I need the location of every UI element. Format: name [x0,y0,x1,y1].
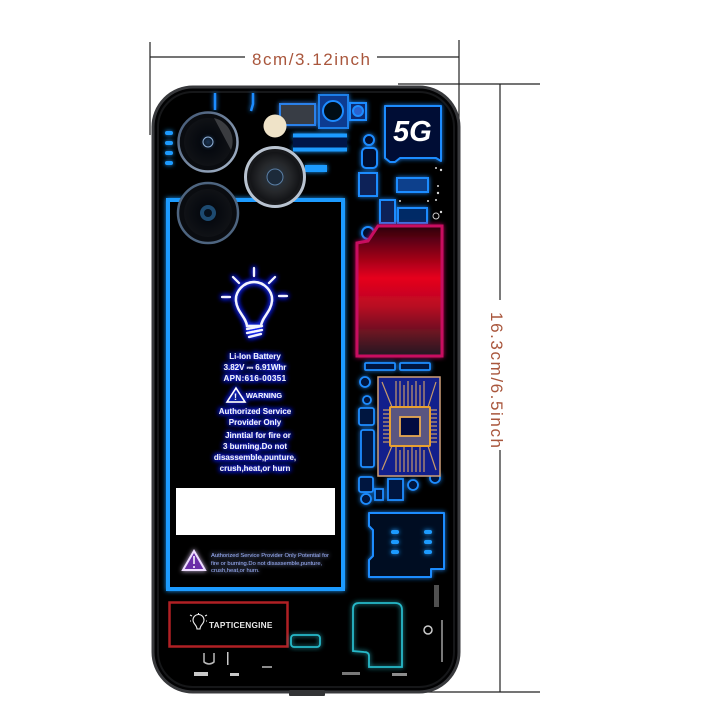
width dimension [150,40,459,135]
battery text: crush,heat,or hurn [220,464,290,473]
height dimension [395,84,540,692]
battery text: Jinntial for fire or [225,431,291,440]
warning triangle [183,551,205,570]
white label [176,488,335,535]
small warning text: Authorized Service Provider Only Potential for [211,553,329,559]
connector pills and side parts [359,363,440,504]
chip core [390,407,430,446]
processor chip [378,377,440,476]
camera lenses [178,112,304,243]
taptic text: TAPTICENGINE [209,620,273,630]
battery text: 3 burning.Do not [223,442,287,451]
battery text: 3.82V ⎓ 6.91Whr [224,363,286,372]
case body [153,87,459,692]
battery text: Authorized Service [219,407,292,416]
right side specks [399,167,442,219]
case bottom button [289,690,325,696]
bottom components [194,585,443,676]
phone case [153,87,459,696]
red block [357,226,442,356]
battery text: Provider Only [229,418,282,427]
battery text [214,352,296,473]
cyan pill [291,635,320,647]
chip center [400,417,420,436]
cyan outline shape [353,603,402,667]
battery text: ! [234,392,237,402]
side dots [165,131,173,165]
lens bottom left [178,183,238,243]
battery frame [168,200,343,589]
circuit components, top [215,93,428,239]
battery panel [168,200,343,589]
lens top left [178,112,238,172]
taptic engine label [170,602,288,646]
bulb icon [222,268,287,337]
sensor dot [264,218,286,240]
flash [264,114,286,138]
5G label: 5G [393,116,432,148]
5G chip [385,106,441,162]
battery text: APN:616-00351 [223,374,287,383]
width label: 8cm/3.12inch [252,50,370,69]
chip traces [382,381,437,472]
small warning text: crush,heat,or hurn. [211,568,260,574]
SIM contacts [391,530,432,554]
lens center [246,148,304,206]
battery text: Li-Ion Battery [229,352,281,361]
small warning text: fire or burning.Do not disassemble,punture, [211,561,323,567]
small bulb icon [190,613,207,629]
SIM slot [369,513,444,577]
battery text: WARNING [246,391,282,400]
height label: 16.3cm/6.5inch [487,312,506,448]
battery text: disassemble,punture, [214,453,296,462]
inner case edge [158,92,454,687]
small warning text [211,553,329,574]
